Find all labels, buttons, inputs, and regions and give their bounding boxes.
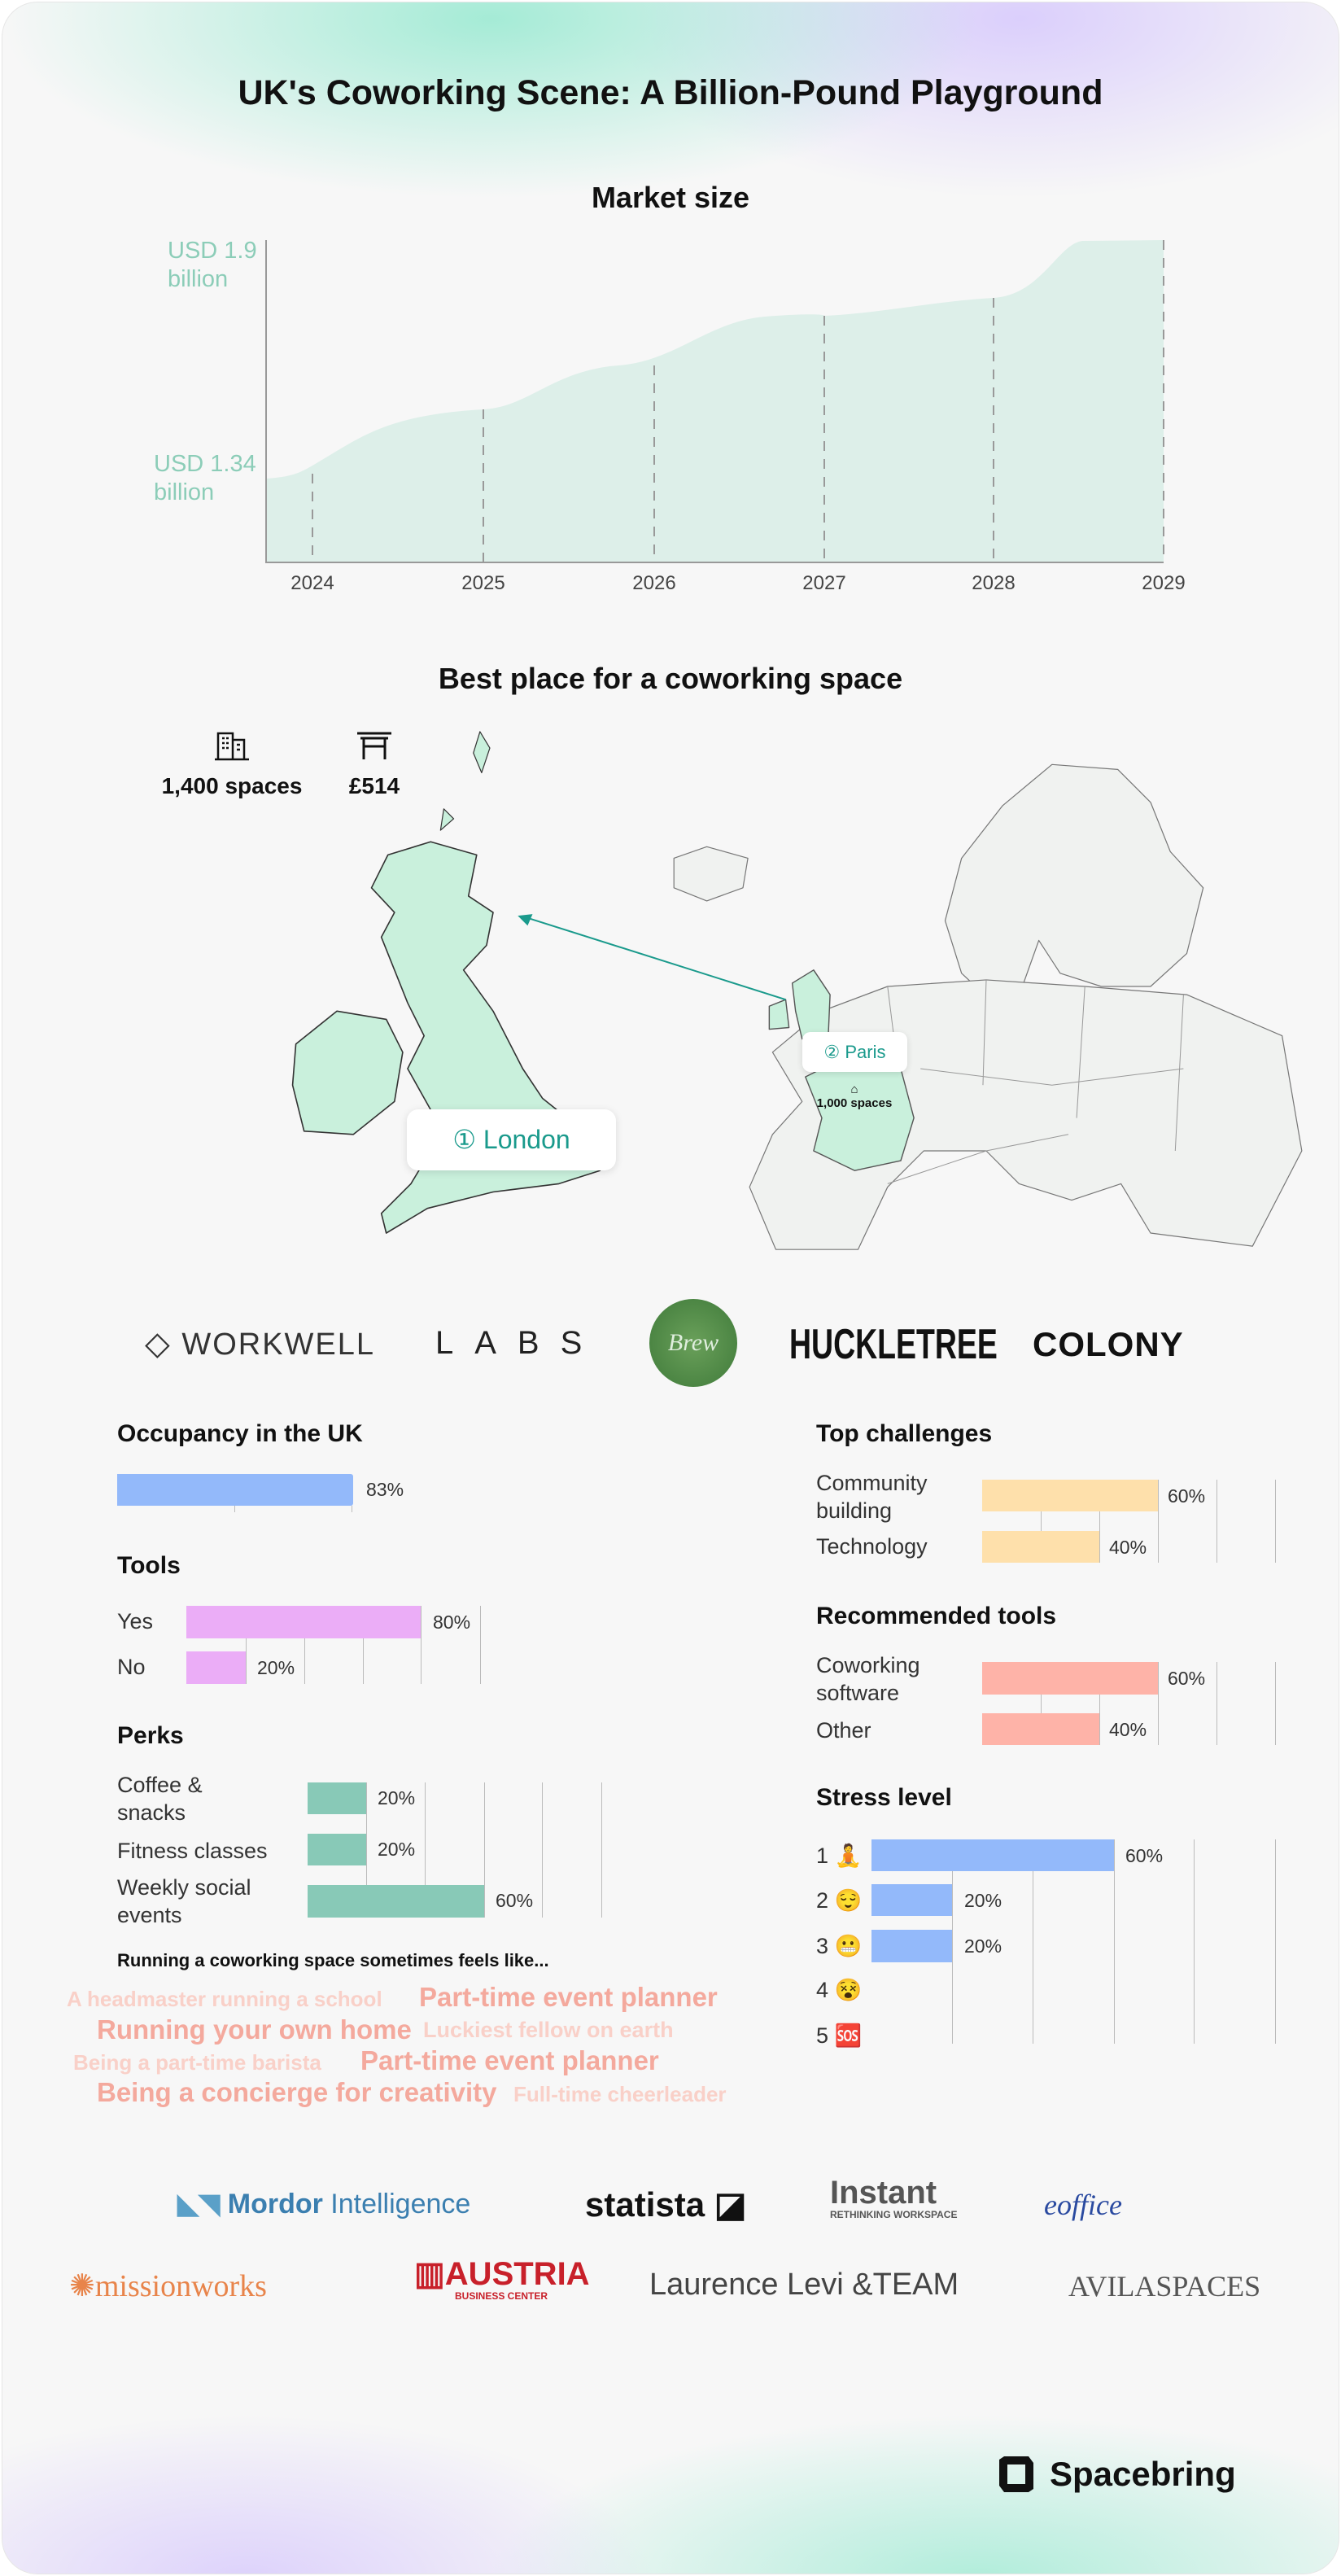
panel: tools: 20%: [257, 1657, 295, 1678]
decorative bottom gradient: [2, 2363, 1341, 2576]
chart: market size area: 2027: [802, 572, 846, 594]
heading: market size: Market size: [592, 181, 749, 214]
word cloud: Full-time cheerleader: [513, 2082, 727, 2106]
callout: Paris: ② Paris: [824, 1042, 885, 1062]
panel: recommended tools: Other: [816, 1718, 871, 1743]
sources logos: [69, 2175, 1260, 2303]
logo: missionworks: ✺missionworks: [69, 2269, 267, 2303]
panel: occupancy: [117, 1420, 404, 1512]
panel: top challenges: Community: [816, 1471, 928, 1495]
panel: tools: 80%: [433, 1612, 470, 1633]
chart: market size area: 2028: [972, 572, 1016, 594]
chart: market size area: 2024: [290, 572, 334, 594]
panel: recommended tools: software: [816, 1681, 899, 1705]
logo: labs: LABS: [435, 1325, 603, 1361]
chart: market size area: USD 1.9: [168, 238, 257, 264]
word cloud: Part-time event planner: [419, 1982, 718, 2012]
logo: avilaspaces: AVILASPACES: [1068, 2270, 1260, 2303]
panel: stress level: 20%: [964, 1890, 1002, 1911]
chart: market size area: billion: [168, 266, 228, 292]
logo: austria: ▥AUSTRIA: [414, 2256, 590, 2292]
word cloud: Being a part-time barista: [73, 2050, 321, 2075]
callout: London: [407, 1109, 616, 1170]
word cloud: [67, 1982, 727, 2107]
panel: perks: 20%: [378, 1787, 415, 1808]
chart: market size area: 2026: [632, 572, 676, 594]
word cloud: Being a concierge for creativity: [97, 2077, 497, 2107]
word cloud: Part-time event planner: [360, 2045, 659, 2075]
logo: brew: [649, 1299, 737, 1387]
text: feels like heading: Running a coworking space sometimes feels like...: [117, 1950, 549, 1970]
stat: price: [349, 733, 400, 798]
panel: recommended tools: 40%: [1109, 1719, 1147, 1740]
panel: top challenges: building: [816, 1498, 892, 1523]
word cloud: A headmaster running a school: [67, 1987, 382, 2011]
panel: perks: 60%: [496, 1890, 533, 1911]
panel: stress level: [816, 1784, 1276, 2048]
logos row: [145, 1299, 1184, 1387]
panel: stress level: 20%: [964, 1935, 1002, 1957]
logo: workwell: ◇ WORKWELL: [145, 1326, 375, 1362]
panel: perks: 20%: [378, 1839, 415, 1860]
panel: perks: Weekly social: [117, 1875, 251, 1900]
map: UK and Europe: [291, 731, 1302, 1250]
panel: tools: Yes: [117, 1609, 153, 1634]
panel: recommended tools: [816, 1603, 1276, 1745]
word cloud: Running your own home: [97, 2014, 412, 2045]
panel: tools: No: [117, 1655, 146, 1679]
panel: recommended tools: Recommended tools: [816, 1603, 1056, 1629]
panel: perks: snacks: [117, 1800, 186, 1825]
stat: spaces: [162, 733, 302, 798]
logo: laurence levi: Laurence Levi &TEAM: [649, 2268, 959, 2302]
heading: best place: Best place for a coworking space: [439, 662, 902, 695]
label: Paris spaces: ⌂: [850, 1082, 858, 1096]
panel: stress level: 2 😌: [816, 1888, 862, 1913]
logo: austria: BUSINESS CENTER: [455, 2290, 548, 2302]
panel: top challenges: Top challenges: [816, 1420, 992, 1447]
panel: perks: events: [117, 1903, 182, 1927]
chart: market size area: 2029: [1142, 572, 1186, 594]
panel: recommended tools: Coworking: [816, 1653, 920, 1677]
chart: market size area: [154, 238, 1186, 594]
logo: instant: RETHINKING WORKSPACE: [830, 2209, 957, 2220]
logo: mordor intelligence: ◣◥ Mordor Intelligence: [177, 2189, 470, 2220]
logo: instant: [830, 2175, 957, 2220]
stat: price: £514: [349, 773, 400, 798]
word cloud: Luckiest fellow on earth: [423, 2018, 674, 2042]
logo: instant: Instant: [830, 2175, 937, 2211]
panel: top challenges: [816, 1420, 1276, 1563]
panel: stress level: 4 😵: [816, 1978, 862, 2002]
callout: Paris: [802, 1032, 907, 1072]
panel: perks: Coffee &: [117, 1773, 203, 1797]
panel: stress level: Stress level: [816, 1784, 952, 1811]
chart: market size area: USD 1.34: [154, 451, 256, 477]
panel: top challenges: 40%: [1109, 1537, 1147, 1558]
label: Paris spaces: 1,000 spaces: [817, 1096, 892, 1110]
brand: spacebring: Spacebring: [1050, 2455, 1236, 2493]
decorative top gradient: [2, 2, 1341, 271]
panel: stress level: 1 🧘: [816, 1843, 862, 1868]
callout: London: ① London: [452, 1125, 570, 1154]
panel: stress level: 60%: [1125, 1845, 1163, 1866]
panel: perks: Perks: [117, 1722, 184, 1749]
label: Paris spaces: [817, 1082, 892, 1110]
panel: stress level: 5 🆘: [816, 2023, 862, 2048]
panel: recommended tools: 60%: [1168, 1668, 1205, 1689]
panel: top challenges: 60%: [1168, 1485, 1205, 1507]
panel: occupancy: 83%: [366, 1479, 404, 1500]
panel: perks: [117, 1722, 602, 1927]
logo: brew: Brew: [668, 1329, 719, 1356]
logo: colony: COLONY: [1033, 1325, 1184, 1363]
logo: statista: statista ◪: [585, 2185, 746, 2224]
title: UK's Coworking Scene: A Billion-Pound Playground: [238, 73, 1103, 112]
panel: top challenges: Technology: [816, 1534, 928, 1559]
chart: market size area: billion: [154, 479, 214, 505]
panel: occupancy: Occupancy in the UK: [117, 1420, 363, 1447]
stat: spaces: 1,400 spaces: [162, 773, 302, 798]
chart: market size area: 2025: [461, 572, 505, 594]
panel: perks: Fitness classes: [117, 1839, 268, 1863]
panel: tools: Tools: [117, 1552, 181, 1579]
logo: eoffice: eoffice: [1044, 2189, 1122, 2221]
panel: tools: [117, 1552, 481, 1684]
logo: huckletree: HUCKLETREE: [789, 1321, 998, 1368]
panel: stress level: 3 😬: [816, 1934, 862, 1958]
